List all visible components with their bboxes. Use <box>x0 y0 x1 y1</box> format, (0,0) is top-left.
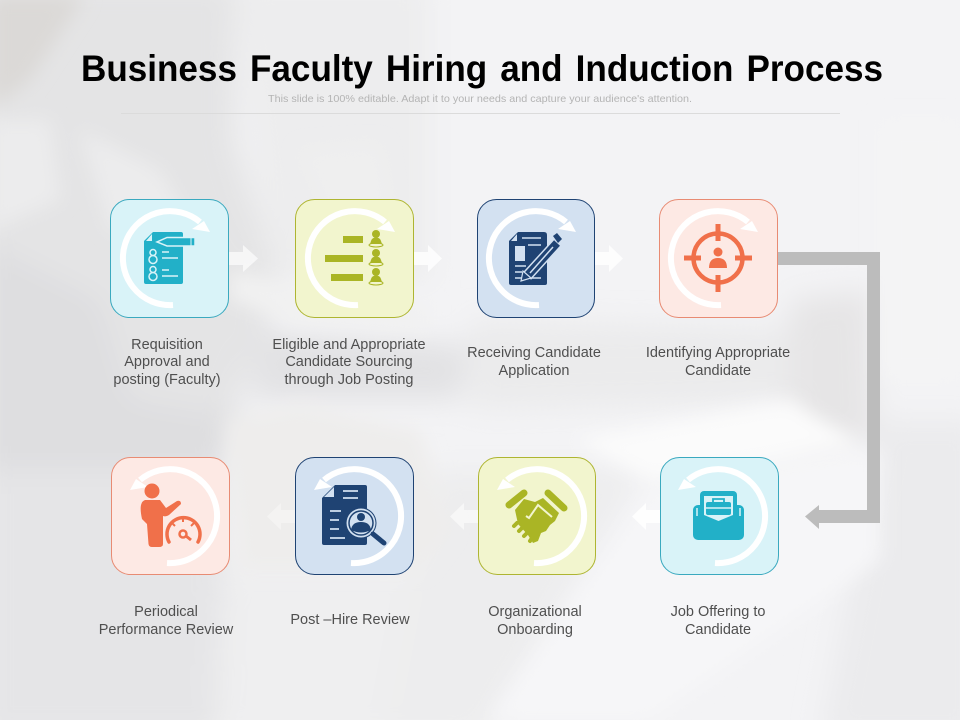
arrow: step 3 to 4 <box>595 245 623 272</box>
label: step 8: Job Offering to <box>671 604 765 620</box>
arrow: step 8 to 7 <box>632 503 660 530</box>
label: step 1: posting (Faculty) <box>113 372 221 388</box>
step 8: job offering card <box>660 458 778 574</box>
title: Business Faculty Hiring and Induction Process <box>81 48 883 89</box>
step 1: requisition card <box>110 200 228 318</box>
arrow: step 4 to 8 connector <box>778 252 880 529</box>
icon: target with person <box>684 224 752 292</box>
step 2: candidate sourcing card <box>296 200 414 318</box>
label: step 3: Receiving Candidate <box>467 345 601 361</box>
icon: envelope with briefcase <box>693 491 744 540</box>
icon: ranked candidates <box>325 230 383 285</box>
subtitle: This slide is 100% editable. Adapt it to your needs and capture your audience's attention. <box>268 93 692 105</box>
icon: form and pen <box>509 232 562 285</box>
step 3: candidate application card <box>478 200 594 318</box>
label: step 5: Performance Review <box>99 622 234 638</box>
icon: person with gauge <box>141 484 200 547</box>
label: step 6: Post –Hire Review <box>290 612 410 628</box>
label: step 7: Onboarding <box>497 622 573 638</box>
step 4: identifying candidate card <box>660 200 778 318</box>
arrow: step 1 to 2 <box>229 245 258 272</box>
step 6: post-hire review card <box>296 458 414 574</box>
label: step 4: Identifying Appropriate <box>646 345 790 361</box>
label: step 3: Application <box>499 363 569 379</box>
label: step 2: Candidate Sourcing <box>285 354 413 370</box>
label: step 4: Candidate <box>685 363 751 379</box>
label: step 2: through Job Posting <box>285 372 413 388</box>
label: step 5: Periodical <box>134 604 198 620</box>
label: step 2: Eligible and Appropriate <box>272 337 426 353</box>
icon: document with pencil <box>144 232 195 284</box>
label: step 8: Candidate <box>685 622 751 638</box>
arrow: step 2 to 3 <box>414 245 442 272</box>
icon: handshake <box>509 493 564 543</box>
label: step 1: Requisition <box>131 337 203 353</box>
label: step 1: Approval and <box>124 354 210 370</box>
icon: document with magnifier <box>322 485 384 545</box>
arrow: step 7 to 6 <box>450 503 478 530</box>
step 7: onboarding card <box>478 458 596 574</box>
arrow: step 6 to 5 <box>267 503 295 530</box>
label: step 7: Organizational <box>488 604 582 620</box>
step 5: performance review card <box>112 458 230 574</box>
